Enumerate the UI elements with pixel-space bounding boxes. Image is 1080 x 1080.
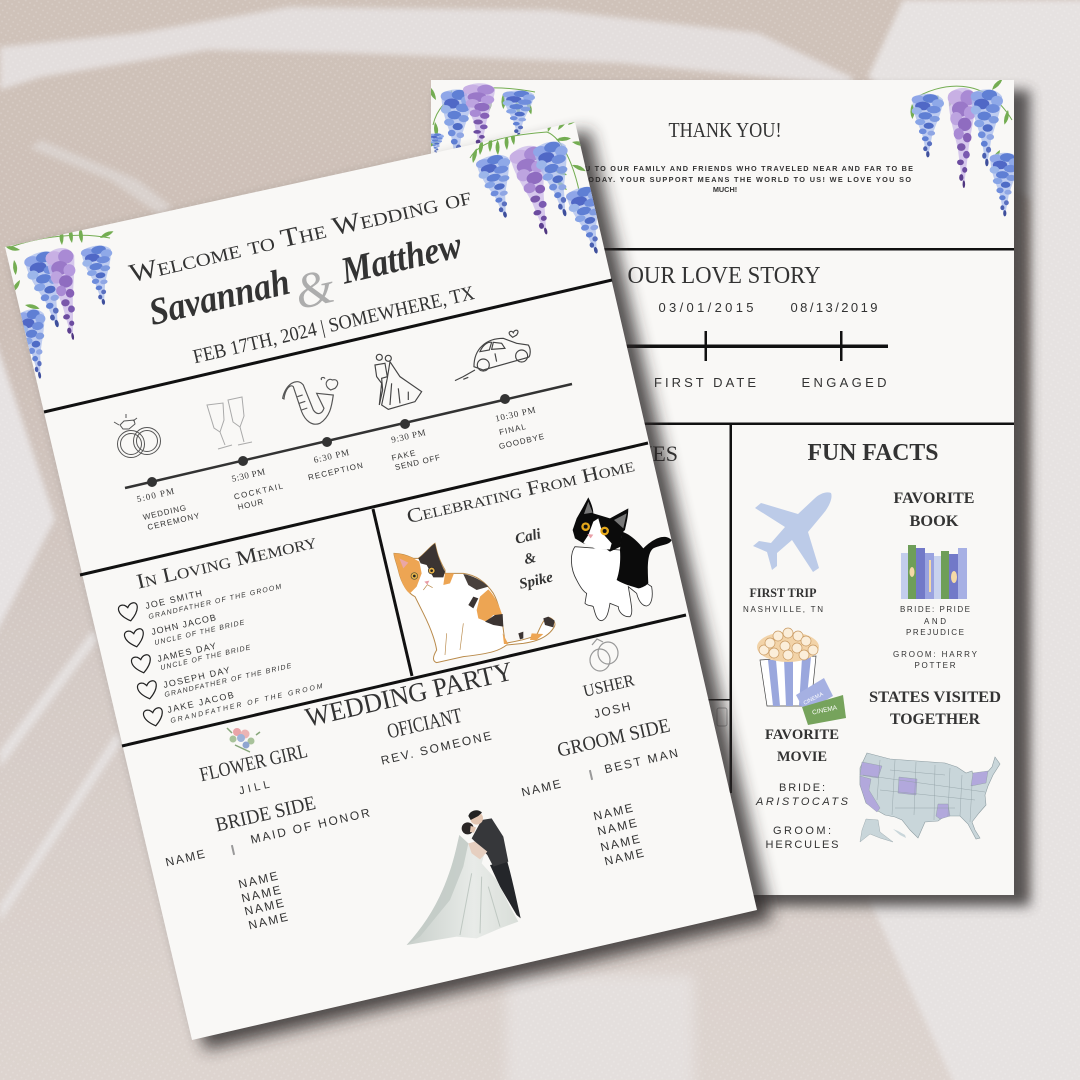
heading: our love story: OUR LOVE STORY — [628, 263, 820, 289]
memorial list: UNCLE OF THE BRIDE — [160, 644, 251, 672]
love story timeline: 08/13/2019 — [790, 300, 878, 315]
text block: thank you message: WITH US TODAY. YOUR SUPPORT MEANS THE WORLD TO US! WE LOVE YOU SO — [539, 175, 911, 184]
memorial list: GRANDFATHER OF THE BRIDE — [164, 663, 292, 699]
schedule icon: getaway car — [455, 330, 530, 381]
schedule times: 5:30 PM — [231, 466, 266, 484]
panel: celebrating from home — [394, 454, 672, 663]
group: bride side: MAID OF HONOR — [249, 805, 371, 847]
role: flower girl: FLOWER GIRL — [198, 740, 310, 786]
group: bride side: NAME — [164, 847, 206, 869]
panel: fun facts: NASHVILLE, TN — [743, 605, 823, 614]
small hidden icon — [717, 708, 727, 726]
panel: back card — [426, 77, 1020, 895]
group: groom side: NAME — [520, 777, 562, 799]
schedule labels: FINAL — [498, 422, 527, 437]
illustration: bride and groom — [407, 810, 521, 945]
text: favorite book answers: BRIDE: PRIDE — [900, 605, 970, 614]
text: states visited together: STATES VISITED — [869, 689, 1001, 706]
panel: fun facts: MOVIE — [777, 749, 827, 765]
group: bride side: NAME — [247, 910, 289, 932]
icon: popcorn — [757, 628, 819, 706]
text: favorite movie answers: HERCULES — [766, 839, 838, 851]
memorial list: JOHN JACOB — [150, 612, 217, 637]
text: favorite movie answers: ARISTOCATS — [755, 796, 849, 808]
schedule labels: COCKTAIL — [233, 481, 284, 502]
couple names: & — [289, 257, 340, 320]
love story timeline — [431, 248, 1014, 390]
illustration: calico cat — [394, 543, 555, 663]
schedule labels: RECEPTION — [307, 461, 364, 482]
schedule labels: CEREMONY — [147, 511, 201, 532]
role: usher: USHER — [581, 670, 637, 701]
group: groom side: GROOM SIDE — [555, 715, 672, 762]
text: first trip: FIRST TRIP — [750, 586, 817, 600]
heading: wedding party: WEDDING PARTY — [302, 656, 516, 733]
icon: cinema tickets: CINEMA — [803, 691, 825, 707]
role: usher — [581, 670, 637, 721]
memorial list: JAKE JACOB — [166, 690, 235, 715]
text block: thank you message — [537, 164, 913, 194]
floral: front card top right — [470, 122, 598, 254]
icon: airplane — [753, 492, 832, 572]
text: favorite book answers: GROOM: HARRY — [893, 650, 978, 659]
couple names — [145, 224, 466, 334]
schedule labels — [142, 422, 545, 532]
text: favorite movie answers — [755, 782, 849, 851]
memorial list: JAMES DAY — [156, 641, 217, 664]
schedule icon: champagne flutes — [207, 397, 252, 449]
group: bride side: NAME — [243, 896, 285, 918]
text: favorite book answers: AND — [924, 617, 946, 626]
text: favorite movie answers: BRIDE: — [779, 782, 825, 794]
group: groom side: BEST MAN — [603, 746, 679, 776]
role: usher: JOSH — [592, 699, 632, 721]
schedule labels: GOODBYE — [498, 432, 545, 451]
couple names: Savannah — [145, 261, 294, 334]
panel: in loving memory — [118, 529, 324, 728]
schedule icon: couple line drawing — [375, 354, 422, 409]
icon: cinema tickets — [796, 678, 846, 725]
panel: fun facts: BOOK — [910, 513, 958, 530]
schedule labels: WEDDING — [142, 503, 187, 522]
heading: celebrating from home: Celebrating From Home — [405, 454, 637, 528]
text: cat names: Spike — [518, 569, 555, 593]
floral: front card top left — [5, 228, 119, 381]
panel: wedding party — [164, 639, 679, 945]
schedule times — [136, 405, 536, 504]
group: bride side: BRIDE SIDE — [213, 792, 318, 836]
group: groom side: NAME — [596, 816, 638, 838]
role: officiant: REV. SOMEONE — [379, 729, 493, 768]
text: cat names: & — [523, 550, 538, 568]
role: flower girl — [198, 740, 310, 797]
text: cat names — [514, 526, 555, 593]
group: groom side: NAME — [603, 846, 645, 868]
memorial list: GRANDFATHER OF THE GROOM — [148, 583, 282, 621]
heading: fun facts: FUN FACTS — [808, 440, 938, 466]
group: bride side: NAME — [237, 869, 279, 891]
text block: thank you message: THANK YOU TO OUR FAMILY AND FRIENDS WHO TRAVELED NEAR AND FAR TO BE — [537, 164, 913, 173]
title — [126, 181, 477, 368]
text: favorite book answers — [893, 605, 978, 670]
role: officiant: OFICIANT — [385, 703, 464, 743]
icon: cinema tickets: CINEMA — [812, 704, 838, 717]
heading: thank you: THANK YOU! — [668, 118, 782, 142]
group: groom side: NAME — [592, 801, 634, 823]
love story timeline: ENGAGED — [802, 375, 886, 390]
heading: timeline remnant: TIMELINES — [562, 441, 678, 466]
memorial list — [118, 583, 324, 728]
panel: fun facts: TOGETHER — [890, 711, 981, 728]
heading: welcome line: Welcome to The Wedding of — [126, 181, 474, 288]
text: cat names: Cali — [514, 526, 543, 548]
couple names: Matthew — [336, 224, 466, 293]
group: bride side — [164, 792, 371, 932]
memorial list: JOE SMITH — [144, 588, 203, 611]
text: favorite movie answers: GROOM: — [773, 825, 831, 837]
text: favorite book answers: POTTER — [914, 661, 956, 670]
schedule labels: HOUR — [237, 497, 264, 512]
heading: in loving memory: In Loving Memory — [134, 529, 319, 594]
icon: bouquet — [227, 728, 260, 752]
schedule times: 10:30 PM — [494, 405, 536, 424]
schedule timeline — [114, 330, 572, 532]
map: united states — [860, 753, 1000, 842]
schedule labels: FAKE — [391, 448, 416, 463]
panel: fun facts — [743, 440, 1001, 851]
date and place: FEB 17TH, 2024 | SOMEWHERE, TX — [191, 282, 477, 368]
schedule icon: saxophone — [283, 377, 338, 424]
love story timeline: FIRST DATE — [654, 375, 756, 390]
schedule icon: rings — [114, 414, 160, 458]
icon: rings gray — [590, 639, 618, 671]
back card shadow — [440, 90, 1030, 906]
floral: back card top right — [910, 77, 1020, 217]
role: flower girl: JILL — [238, 779, 271, 797]
group: groom side: NAME — [599, 832, 641, 854]
love story timeline: 03/01/2015 — [658, 300, 754, 315]
schedule times: 5:00 PM — [136, 486, 175, 504]
text: favorite movie: FAVORITE — [765, 727, 839, 743]
schedule times: 9:30 PM — [390, 427, 427, 445]
memorial list: GRANDFATHER OF THE GROOM — [170, 683, 324, 725]
front card shadow — [18, 130, 772, 1050]
text: favorite book answers: PREJUDICE — [906, 628, 964, 637]
illustration: tuxedo cat — [571, 497, 672, 621]
group: groom side — [520, 715, 679, 868]
role: officiant — [379, 703, 493, 768]
group: bride side: NAME — [240, 883, 282, 905]
text: favorite book: FAVORITE — [894, 490, 974, 507]
memorial list: JOSEPH DAY — [162, 665, 231, 690]
floral: back card top left — [431, 83, 536, 152]
schedule times: 6:30 PM — [313, 447, 350, 465]
panel dividers — [431, 422, 1014, 793]
panel: front card — [5, 114, 757, 1040]
schedule labels: SEND OFF — [394, 453, 441, 472]
memorial list: UNCLE OF THE BRIDE — [154, 619, 245, 647]
divider lines — [44, 280, 686, 746]
text block: thank you message: MUCH! — [713, 185, 737, 194]
icon: books — [901, 545, 967, 599]
